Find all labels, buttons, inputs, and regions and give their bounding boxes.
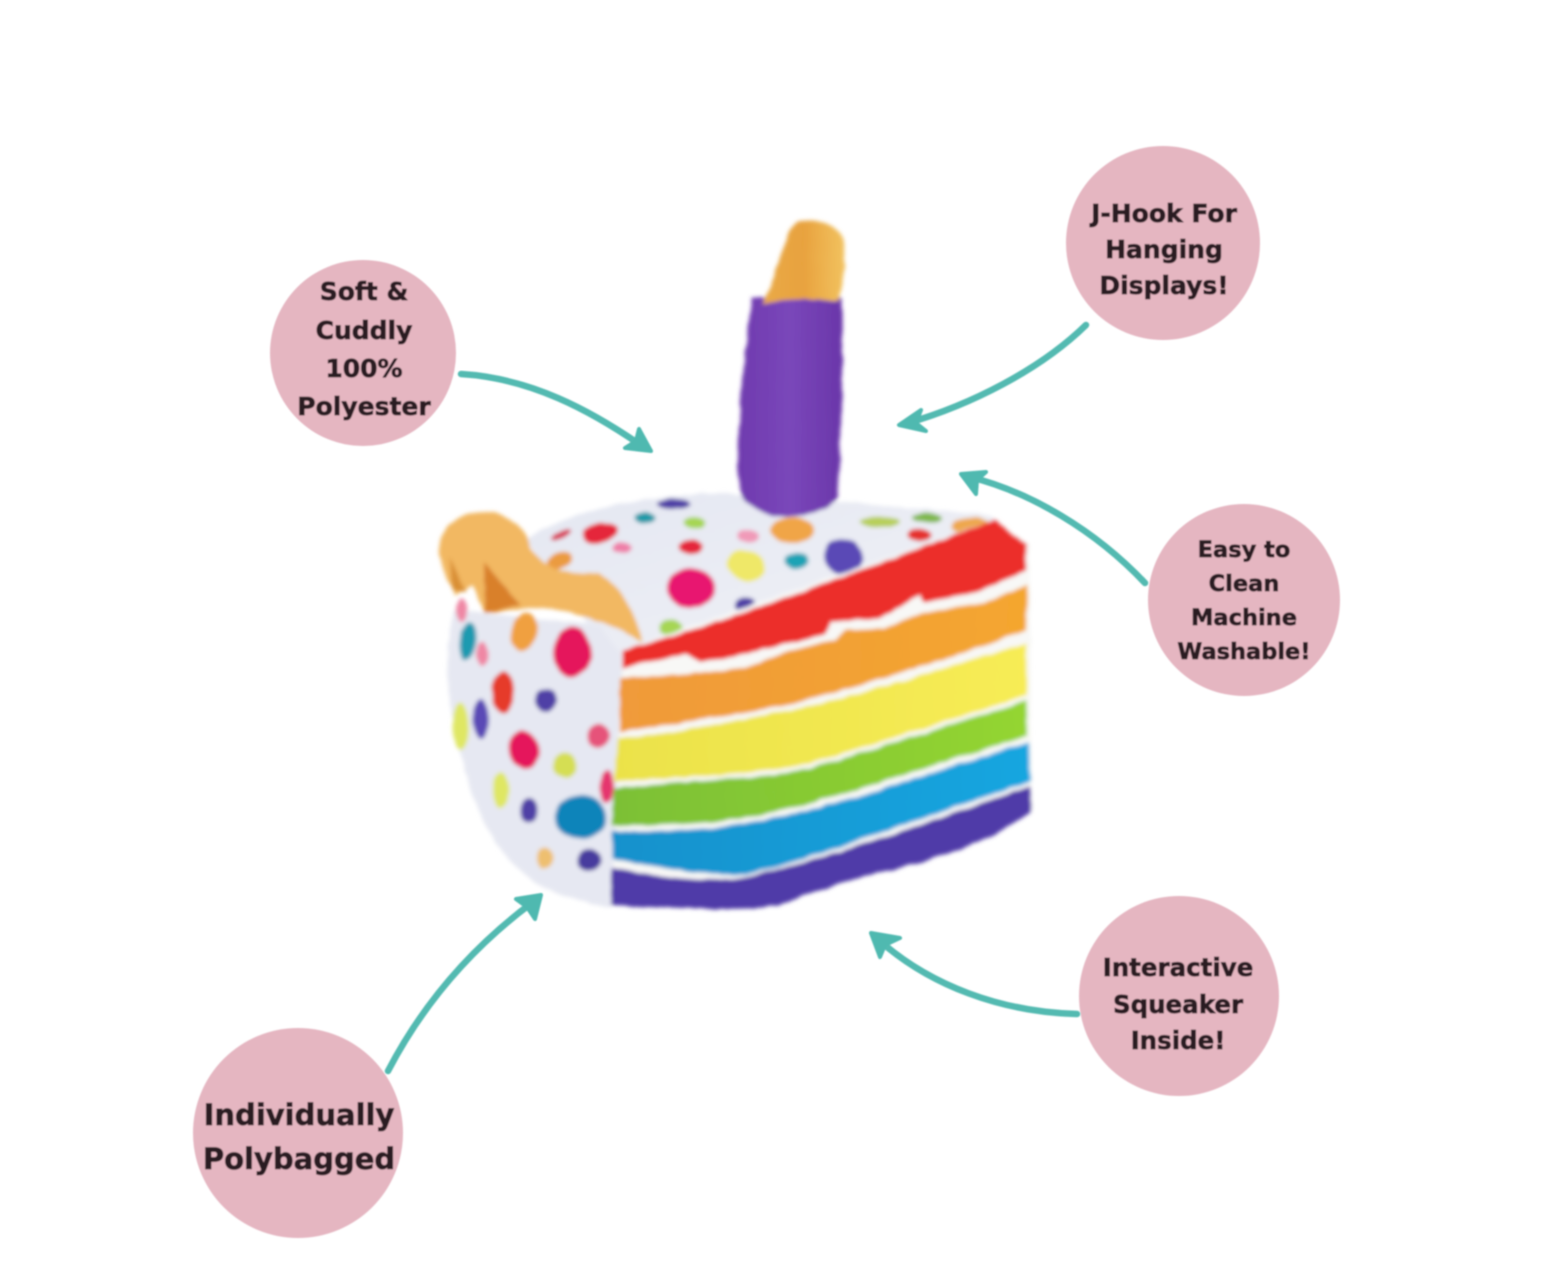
callout: individually polybagged: Polybagged	[203, 1142, 395, 1176]
callout: individually polybagged	[193, 1028, 403, 1238]
arrow: interactive squeaker to cake	[871, 933, 1077, 1014]
orange layer	[620, 585, 1027, 732]
arrow: soft and cuddly to cake	[461, 374, 651, 451]
callout: soft and cuddly	[270, 260, 456, 446]
callout: individually polybagged: Individually	[204, 1098, 394, 1132]
callout: soft and cuddly: Polyester	[297, 392, 431, 421]
product image: rainbow cake slice plush	[440, 221, 1032, 909]
callout: easy to clean	[1148, 504, 1340, 696]
callout: interactive squeaker	[1079, 896, 1279, 1096]
callout: J-hook: J-Hook For	[1089, 199, 1238, 228]
callout: easy to clean: Easy to	[1198, 537, 1290, 563]
green layer	[612, 700, 1028, 826]
callout: J-hook: Hanging	[1105, 235, 1223, 264]
callout: easy to clean: Clean	[1209, 571, 1279, 597]
red layer	[622, 520, 1027, 668]
callout: easy to clean: Washable!	[1177, 639, 1311, 665]
callout: interactive squeaker: Squeaker	[1113, 990, 1244, 1019]
callout: interactive squeaker: Interactive	[1103, 953, 1253, 982]
callout: J-hook	[1066, 146, 1260, 340]
callout: J-hook: Displays!	[1099, 271, 1229, 300]
cake front white gaps	[612, 520, 1032, 909]
purple layer	[612, 786, 1031, 909]
callout: soft and cuddly: Soft &	[320, 277, 408, 306]
cake top icing with dots	[525, 493, 1027, 668]
blue layer	[612, 742, 1030, 875]
callout: easy to clean: Machine	[1191, 605, 1297, 631]
candle flame	[762, 221, 844, 304]
candle body	[738, 298, 842, 517]
arrow: easy to clean to cake	[961, 472, 1145, 583]
callout: interactive squeaker: Inside!	[1131, 1026, 1225, 1055]
cake left side with dots	[448, 598, 625, 908]
pie crust ruffle	[440, 512, 642, 642]
arrow: polybagged to cake	[388, 895, 541, 1071]
arrow: J-hook to candle	[899, 325, 1086, 431]
callout: soft and cuddly: Cuddly	[316, 316, 412, 345]
callout: soft and cuddly: 100%	[325, 354, 403, 383]
yellow layer	[614, 644, 1027, 782]
